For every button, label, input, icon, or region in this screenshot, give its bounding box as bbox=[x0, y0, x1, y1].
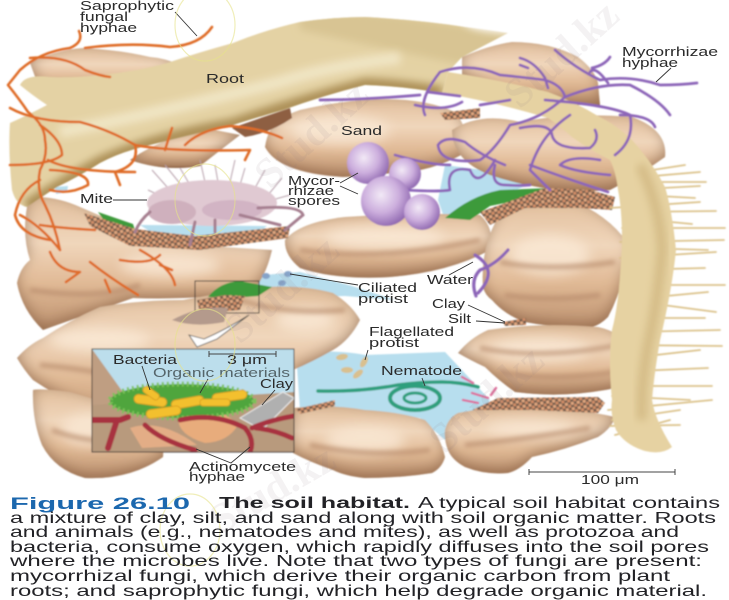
grain: under root bbox=[130, 130, 240, 168]
clay and silt particles bbox=[84, 108, 615, 414]
watermarks: Stud.kz bbox=[246, 72, 378, 197]
magnified area box bbox=[195, 281, 259, 313]
labels: hyphae bbox=[80, 21, 137, 35]
grain: left mid wide bbox=[17, 287, 360, 430]
zoom arrow bbox=[189, 315, 249, 347]
label: 100 micrometre scale: 100 μm bbox=[581, 473, 639, 487]
watermarks bbox=[202, 0, 628, 544]
caption body: and animals (e.g., nematodes and mites), as well as protozoa and bbox=[10, 524, 679, 541]
caption title bbox=[10, 494, 720, 513]
caption title: A typical soil habitat contains bbox=[418, 495, 720, 512]
caption body: where the microbes live. Note that two types of fungi are present: bbox=[8, 553, 702, 570]
watermarks: Stud.kz bbox=[202, 436, 343, 544]
grain: sand bbox=[265, 99, 466, 177]
labels: fungal bbox=[80, 10, 128, 24]
mycorrhizae spores bbox=[347, 142, 440, 230]
grain: behind root, upper left bbox=[30, 48, 180, 95]
label: sand: Sand bbox=[341, 124, 382, 138]
organic matter: green films bbox=[98, 188, 550, 298]
actinomycete hyphae bbox=[93, 416, 294, 452]
labels: protist bbox=[369, 336, 420, 350]
saprophytic fungal hyphae (orange) bbox=[8, 27, 282, 295]
label: mycorrhizae spores: Mycor- bbox=[288, 174, 340, 188]
ciliated protists bbox=[262, 271, 292, 286]
grain: left upper block bbox=[17, 197, 272, 330]
labels: hyphae bbox=[189, 470, 245, 484]
dark underside of sand grain bbox=[232, 108, 292, 137]
grain: bottom right bbox=[445, 407, 615, 473]
inset: magnified microhabitat bbox=[92, 349, 294, 452]
mycorrhizae hyphae (purple) bbox=[320, 50, 697, 296]
labels: spores bbox=[288, 194, 340, 208]
bacteria bbox=[133, 385, 248, 419]
label: bacteria: Bacteria bbox=[113, 353, 177, 367]
caption title: Figure 26.10 bbox=[10, 494, 190, 513]
grain: right lower bbox=[458, 325, 633, 395]
caption body bbox=[8, 510, 716, 600]
soil habitat illustration bbox=[8, 10, 725, 478]
small pink organisms bbox=[462, 377, 496, 403]
label: mycorrhizae hyphae: Mycorrhizae bbox=[622, 45, 718, 59]
main root bbox=[9, 10, 520, 207]
thin root shading bbox=[640, 165, 662, 420]
grain: top right bbox=[462, 42, 600, 105]
grain: right big bbox=[483, 201, 632, 327]
caption body: bacteria, consume oxygen, which rapidly diffuses into the soil pores bbox=[10, 539, 709, 556]
caption body: roots; and saprophytic fungi, which help degrade organic material. bbox=[10, 583, 707, 600]
watermark logos bbox=[160, 0, 235, 566]
grain: centre bbox=[285, 214, 491, 278]
labels bbox=[80, 0, 718, 487]
soil grains bbox=[17, 42, 665, 478]
caption title: The soil habitat. bbox=[219, 495, 410, 512]
watermarks: Stud.kz bbox=[421, 337, 553, 462]
label: silt: Silt bbox=[448, 312, 472, 326]
grain highlights bbox=[50, 115, 590, 454]
label: inset clay: Clay bbox=[260, 377, 294, 391]
label: actinomycete hyphae: Actinomycete bbox=[189, 460, 296, 474]
label: ciliated protist: Ciliated bbox=[358, 281, 417, 295]
nematode bbox=[318, 382, 478, 410]
inset frame bbox=[92, 349, 294, 452]
label: nematode: Nematode bbox=[381, 364, 462, 378]
label: root: Root bbox=[206, 72, 245, 86]
figure caption bbox=[8, 494, 720, 600]
grain creases bbox=[30, 240, 620, 453]
labels: rhizae bbox=[288, 184, 334, 198]
labels: protist bbox=[358, 292, 409, 306]
grain: bottom left bbox=[33, 389, 165, 478]
grain: right cluster bbox=[452, 115, 665, 191]
mineral grain bbox=[178, 414, 237, 444]
thin root bbox=[442, 72, 676, 452]
label: flagellated protist: Flagellated bbox=[369, 325, 454, 339]
labels: hyphae bbox=[622, 56, 678, 70]
root top-right fade bbox=[465, 12, 555, 32]
mite bbox=[135, 160, 303, 245]
watermarks: Stud.kz bbox=[216, 227, 348, 352]
label: 3 micrometre scale: 3 μm bbox=[227, 353, 267, 367]
root hairs bbox=[608, 165, 725, 435]
label: clay: Clay bbox=[432, 297, 466, 311]
fuzzy film at magnified area bbox=[172, 308, 228, 325]
label: organic materials: Organic materials bbox=[153, 366, 290, 380]
label: mite: Mite bbox=[80, 192, 113, 206]
leader lines bbox=[113, 12, 671, 463]
caption body: mycorrhizal fungi, which derive their organic carbon from plant bbox=[10, 568, 671, 585]
scale bar: 100 micrometres bbox=[529, 469, 675, 475]
grain: bottom centre bbox=[293, 406, 445, 478]
mineral grain left bbox=[130, 425, 197, 448]
caption body: a mixture of clay, silt, and sand along with soil organic matter. Roots bbox=[10, 510, 716, 527]
scale bar: 3 micrometres bbox=[209, 351, 276, 357]
label: water: Water bbox=[427, 273, 473, 287]
water-filled pores bbox=[55, 165, 532, 440]
organic material bbox=[110, 384, 254, 418]
flagellated protists bbox=[336, 353, 370, 380]
